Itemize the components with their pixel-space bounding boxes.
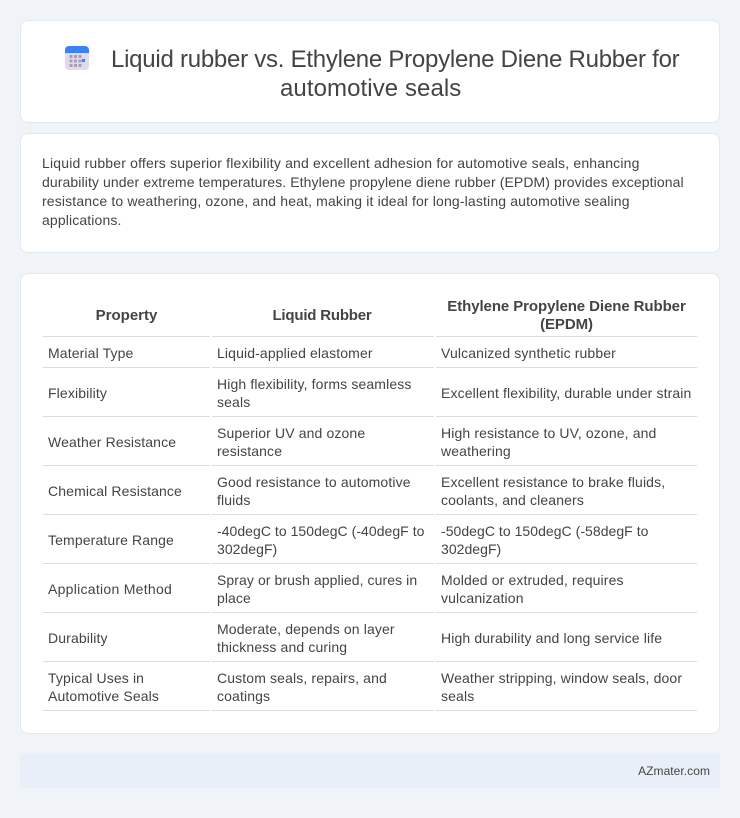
icon: calendar (65, 46, 89, 70)
intro text (42, 155, 684, 228)
table header (96, 298, 686, 333)
row: flexibility: High flexibility, forms seamless (217, 376, 412, 392)
row: typical uses: Custom seals, repairs, and (217, 670, 387, 686)
row: application method: vulcanization (441, 590, 524, 606)
row: material type: Vulcanized synthetic rubber (441, 345, 616, 361)
row: material type: Liquid-applied elastomer (217, 345, 373, 361)
row: durability (48, 621, 662, 655)
row: flexibility: Flexibility (48, 385, 107, 401)
row: weather resistance: Weather Resistance (48, 434, 176, 450)
row: temperature range: Temperature Range (48, 532, 174, 548)
row: temperature range: -50degC to 150degC (-58degF to (441, 523, 648, 539)
row: application method (48, 572, 624, 606)
intro text: durability under extreme temperatures. Ethylene propylene diene rubber (EPDM) provides exceptional (42, 174, 684, 190)
row: weather resistance: resistance (217, 443, 282, 459)
table header: Ethylene Propylene Diene Rubber (447, 298, 686, 315)
row: chemical resistance: fluids (217, 492, 250, 508)
footer bar (20, 754, 720, 788)
intro text: resistance to weathering, ozone, and heat, making it ideal for long-lasting automotive sealing (42, 193, 630, 209)
table header: Property (96, 307, 157, 324)
row: weather resistance: High resistance to UV, ozone, and (441, 425, 656, 441)
row: chemical resistance: Chemical Resistance (48, 483, 182, 499)
row: application method: Application Method (48, 581, 172, 597)
table header: Liquid Rubber (272, 307, 372, 324)
row: weather resistance: Superior UV and ozone (217, 425, 365, 441)
panel: intro (20, 133, 720, 253)
row: chemical resistance (48, 474, 665, 508)
row: durability: Durability (48, 630, 108, 646)
title: Liquid rubber vs. Ethylene Propylene Diene Rubber for (111, 46, 679, 73)
intro text: applications. (42, 212, 122, 228)
row: material type (48, 345, 616, 361)
row: temperature range: -40degC to 150degC (-40degF to (217, 523, 424, 539)
row: material type: Material Type (48, 345, 133, 361)
row: application method: Spray or brush applied, cures in (217, 572, 417, 588)
row: temperature range (48, 523, 648, 557)
panel: comparison table (20, 273, 720, 734)
footer credit: AZmater.com (638, 764, 710, 778)
row: weather resistance: weathering (441, 443, 511, 459)
row: typical uses (48, 670, 682, 704)
row: temperature range: 302degF) (441, 541, 501, 557)
row: typical uses: Typical Uses in (48, 670, 144, 686)
table header: (EPDM) (540, 316, 593, 333)
row: temperature range: 302degF) (217, 541, 277, 557)
row: chemical resistance: Excellent resistance to brake fluids, (441, 474, 665, 490)
row: typical uses: coatings (217, 688, 270, 704)
row: typical uses: Automotive Seals (48, 688, 159, 704)
row: weather resistance (48, 425, 656, 459)
title: automotive seals (280, 75, 461, 102)
row: application method: place (217, 590, 251, 606)
row: application method: Molded or extruded, requires (441, 572, 624, 588)
row: chemical resistance: Good resistance to automotive (217, 474, 411, 490)
panel: header (20, 20, 720, 123)
row: durability: thickness and curing (217, 639, 347, 655)
row: typical uses: seals (441, 688, 474, 704)
row: durability: High durability and long service life (441, 630, 662, 646)
intro text: Liquid rubber offers superior flexibility and excellent adhesion for automotive seals, enhancing (42, 155, 640, 171)
row: chemical resistance: coolants, and cleaners (441, 492, 584, 508)
row: flexibility: Excellent flexibility, durable under strain (441, 385, 691, 401)
row: typical uses: Weather stripping, window seals, door (441, 670, 682, 686)
row: flexibility (48, 376, 691, 410)
title (111, 46, 680, 102)
row: flexibility: seals (217, 394, 250, 410)
row: durability: Moderate, depends on layer (217, 621, 395, 637)
